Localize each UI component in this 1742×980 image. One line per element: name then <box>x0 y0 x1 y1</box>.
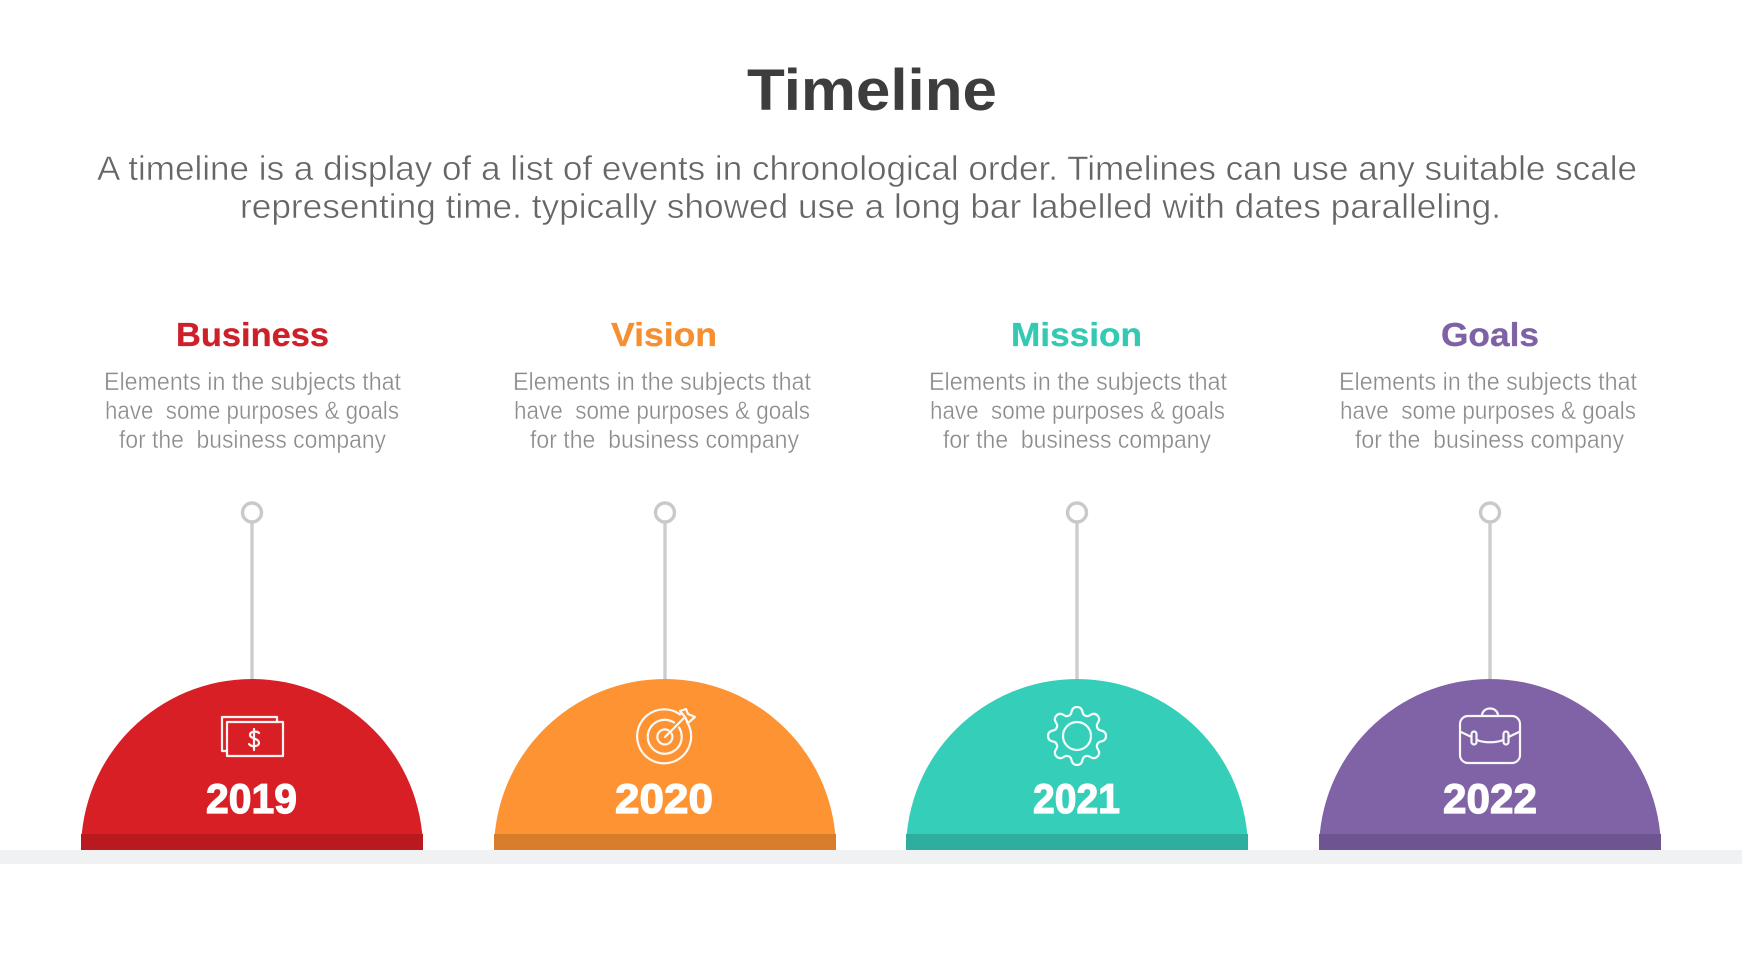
text block: Goals description <box>1339 368 1637 454</box>
text block: Vision description: have some purposes & goals <box>514 397 810 425</box>
subtitle text: representing time. typically showed use a long bar labelled with dates paralleling. <box>240 188 1501 226</box>
text block: Goals description: have some purposes & goals <box>1340 397 1636 425</box>
connector pin <box>1480 503 1500 680</box>
text block: Mission description: for the business company <box>943 426 1211 454</box>
text block: Mission description <box>929 368 1227 454</box>
icon: briefcase <box>1460 708 1520 763</box>
text block: Business description <box>104 368 401 454</box>
text block: Vision description: for the business company <box>530 426 799 454</box>
text block: Business description: for the business company <box>119 426 386 454</box>
icon: gear <box>1048 707 1106 765</box>
heading: Vision: Vision <box>611 316 717 353</box>
icon: money bills <box>222 717 283 756</box>
text block: Mission description: have some purposes & goals <box>930 397 1225 425</box>
semicircle dome <box>494 679 836 850</box>
connector pin <box>1068 503 1086 680</box>
icon: target with arrow <box>637 709 695 763</box>
panel: Vision 2020 <box>494 316 836 850</box>
year: 2019: 2019 <box>206 775 297 822</box>
panel: Business 2019 <box>81 316 423 850</box>
text block: Vision description: Elements in the subjects that <box>513 368 811 396</box>
subtitle text: A timeline is a display of a list of events in chronological order. Timelines can use any suitable scale <box>97 150 1637 188</box>
panel: Mission 2021 <box>906 316 1248 850</box>
text block: Mission description: Elements in the subjects that <box>929 368 1227 396</box>
semicircle dome <box>906 679 1248 850</box>
text block: Goals description: for the business company <box>1355 426 1624 454</box>
year: 2022: 2022 <box>1443 775 1537 822</box>
subtitle text <box>97 150 1637 226</box>
text block: Vision description <box>513 368 811 454</box>
panel: Goals 2022 <box>1319 316 1661 850</box>
floor bar <box>0 850 1742 864</box>
semicircle dome <box>81 679 423 850</box>
text block: Business description: Elements in the subjects that <box>104 368 401 396</box>
text block: Business description: have some purposes & goals <box>105 397 399 425</box>
year: 2021: 2021 <box>1033 775 1120 822</box>
text block: Goals description: Elements in the subjects that <box>1339 368 1637 396</box>
connector pin <box>242 503 262 680</box>
semicircle dome <box>1319 679 1661 850</box>
connector pin <box>656 503 674 680</box>
year: 2020: 2020 <box>615 775 713 822</box>
heading: Goals: Goals <box>1441 316 1539 353</box>
title: Timeline <box>747 58 997 123</box>
heading: Business: Business <box>176 316 329 353</box>
heading: Mission: Mission <box>1011 316 1142 353</box>
